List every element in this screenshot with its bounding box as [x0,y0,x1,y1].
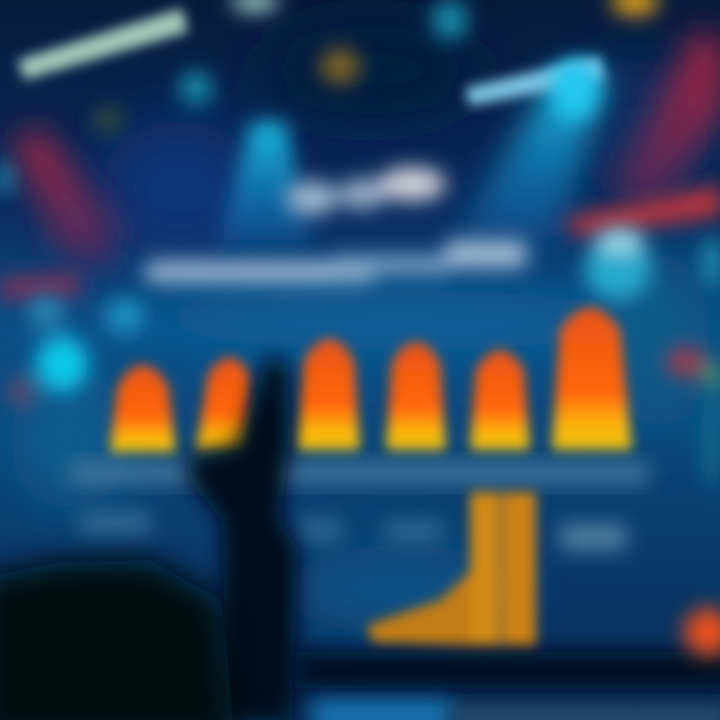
red strip left [0,274,80,300]
bar 5 [470,350,530,450]
spotlight beam left [218,122,312,245]
right spotlight top bar [465,56,604,106]
tall gold bars [470,492,500,648]
cyan glows [8,228,720,490]
gold steps [368,572,470,648]
bottom dark ledge [295,652,720,688]
blurred heading line 1 [286,167,446,215]
hand silhouette [186,355,298,720]
red beam upper right [610,30,720,205]
blurred axis labels [80,510,626,550]
bottom right pale strip [450,706,720,720]
bar 4 [386,342,446,450]
bar 3 [296,339,360,450]
bottom cyan strip [312,700,452,720]
bar 2 [196,358,250,452]
pale band under bars [70,462,648,484]
orange blob right [684,608,720,656]
spotlight beam right [455,70,605,245]
top left pale bar [18,8,188,80]
orange bar chart [110,308,632,452]
bright beam head [551,60,599,120]
blurred heading line 2 [145,240,527,282]
small top glows [0,0,659,196]
red bar right [566,184,720,236]
bar 1 [110,365,176,452]
bar 6 [552,308,632,450]
gold staircase chart [368,492,536,648]
red beam left [12,128,120,270]
bottom left dark silhouette [0,560,235,720]
